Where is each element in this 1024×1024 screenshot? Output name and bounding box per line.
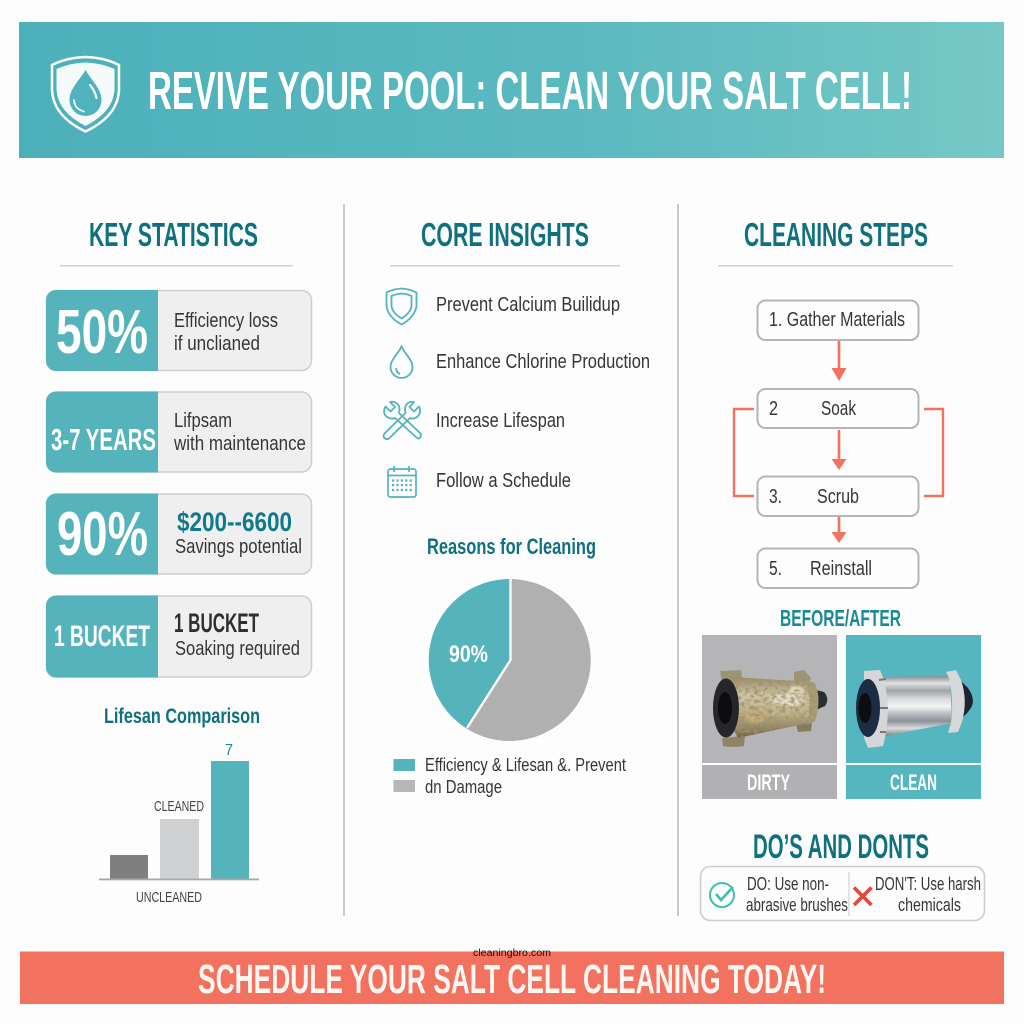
stat card: 50%: Efficiency loss xyxy=(174,310,278,332)
legend: Efficiency & Lifesan &. Prevent xyxy=(425,755,626,775)
label: dirty xyxy=(702,765,837,799)
column dividers xyxy=(344,204,678,916)
insight: follow a schedule xyxy=(388,466,571,497)
icon: check circle xyxy=(710,883,734,907)
flowchart xyxy=(734,300,943,588)
watermark: cleaningbro.com xyxy=(473,948,551,959)
arrow: step 2 to 3 xyxy=(832,430,846,470)
insight: increase lifespan xyxy=(384,402,565,439)
stat card: 90% xyxy=(46,494,312,574)
stat card: 3-7 years: Lifpsam xyxy=(174,410,232,432)
stat card: 90%: 90% xyxy=(57,500,148,569)
icon: water drop xyxy=(390,346,412,378)
insight: enhance chlorine production: Enhance Chlorine Production xyxy=(436,351,650,373)
stat card: 90%: $200--6600 xyxy=(177,507,292,537)
step 1: 1. Gather Materials xyxy=(769,309,905,331)
stat card: 3-7 years: with maintenance xyxy=(173,433,306,455)
photo: clean salt cell xyxy=(846,635,981,763)
bar chart: lifespan comparison: CLEANED xyxy=(154,798,204,815)
legend: dn Damage xyxy=(425,777,502,797)
step 2: 2 xyxy=(769,398,778,420)
pie chart: reasons for cleaning: Reasons for Cleaning xyxy=(427,534,596,559)
label: clean: CLEAN xyxy=(890,770,937,795)
stat card: 1 bucket xyxy=(46,596,312,678)
insight: prevent calcium buildup: Prevent Calcium Builidup xyxy=(436,294,620,316)
insight: enhance chlorine production xyxy=(390,346,650,378)
photo: dirty salt cell xyxy=(702,635,837,763)
stat card: 3-7 years xyxy=(46,392,312,472)
icon: shield with water drop xyxy=(52,57,119,132)
panel: cleaning steps xyxy=(700,216,984,920)
stat card: 50% xyxy=(46,290,312,371)
panel: do's and don'ts: DON'T: Use harsh xyxy=(875,874,981,894)
icon: crossed wrenches xyxy=(384,402,421,439)
step 3: 3. xyxy=(769,486,782,508)
stat card: 1 bucket: 1 BUCKET xyxy=(54,620,150,653)
insight: increase lifespan: Increase Lifespan xyxy=(436,410,565,432)
panel: core insights xyxy=(384,216,650,797)
icon: calendar xyxy=(388,466,416,497)
arrow: step 3 to 5 xyxy=(832,517,846,543)
legend xyxy=(394,755,626,797)
stat card: 1 bucket: Soaking required xyxy=(175,638,300,660)
before and after comparison xyxy=(702,605,981,799)
stat card: 1 bucket: 1 BUCKET xyxy=(174,608,259,638)
insight: follow a schedule: Follow a Schedule xyxy=(436,470,571,492)
panel: do's and don'ts: DO: Use non- xyxy=(747,874,829,894)
bar chart: lifespan comparison: 7 xyxy=(225,742,233,759)
bar chart: lifespan comparison: UNCLEANED xyxy=(136,889,202,906)
insight: prevent calcium buildup xyxy=(386,288,620,324)
stat card: 50%: if unclianed xyxy=(174,333,260,355)
pie chart: reasons for cleaning: 90% xyxy=(449,641,488,668)
heading: core insights: CORE INSIGHTS xyxy=(421,216,589,253)
header banner xyxy=(19,22,1004,158)
bracket: left loop xyxy=(734,409,754,496)
step 5: Reinstall xyxy=(810,558,872,580)
label: clean xyxy=(846,765,981,799)
step 5 xyxy=(758,548,918,588)
bar chart: lifespan comparison xyxy=(99,705,260,906)
panel: key statistics xyxy=(46,216,312,906)
bar chart: lifespan comparison: Lifesan Comparison xyxy=(104,705,260,728)
heading: key statistics: KEY STATISTICS xyxy=(89,216,258,253)
panel: do's and don'ts: chemicals xyxy=(898,895,961,915)
icon: red cross xyxy=(854,888,872,905)
step 1 xyxy=(758,300,918,340)
before and after comparison: BEFORE/AFTER xyxy=(780,605,901,631)
arrow: step 1 to 2 xyxy=(832,341,846,381)
stat card: 50%: 50% xyxy=(56,298,148,367)
bracket: right loop xyxy=(924,409,943,496)
step 2 xyxy=(758,389,918,428)
panel: do's and don'ts: abrasive brushes xyxy=(746,895,848,915)
panel: do's and don'ts xyxy=(700,866,984,920)
stat card: 3-7 years: 3-7 YEARS xyxy=(51,422,156,457)
stat card: 90%: Savings potential xyxy=(175,536,302,558)
icon: shield xyxy=(386,288,416,324)
step 3 xyxy=(758,476,918,516)
step 3: Scrub xyxy=(817,486,859,508)
step 2: Soak xyxy=(821,398,857,420)
pie chart: reasons for cleaning xyxy=(394,534,626,797)
step 5: 5. xyxy=(769,558,782,580)
label: dirty: DIRTY xyxy=(747,770,790,795)
